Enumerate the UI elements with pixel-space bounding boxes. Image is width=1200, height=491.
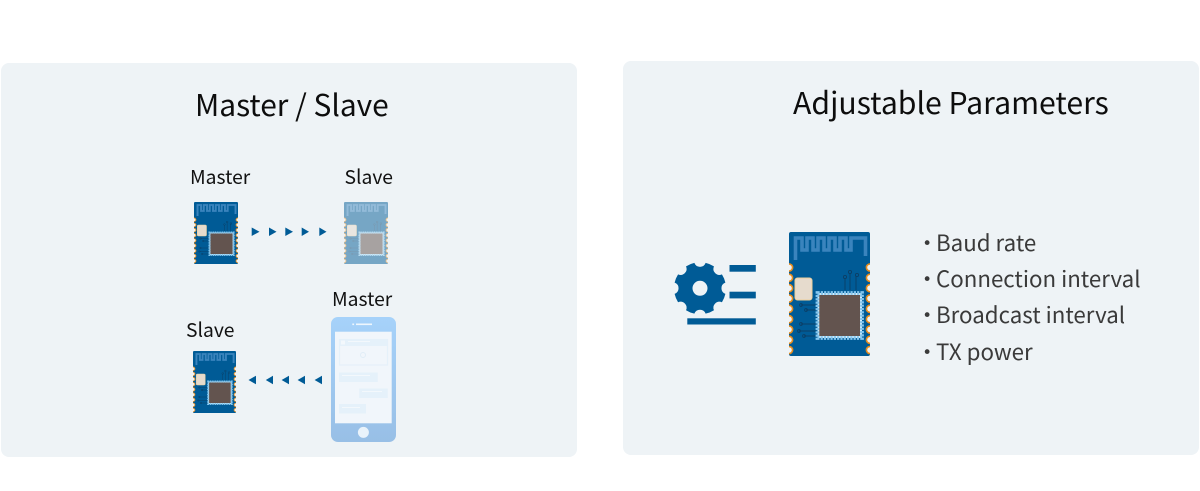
list: parameters: ·: [916, 298, 938, 330]
arrows: phone to slave: [248, 376, 322, 384]
label: Slave bottom: Slave: [186, 315, 234, 343]
list: parameters: Broadcast interval: [936, 298, 1125, 330]
heading: Master / Slave: Master / Slave: [195, 81, 389, 125]
list: parameters: ·: [916, 226, 938, 258]
label: Slave top: Slave: [344, 162, 393, 190]
list: parameters: Baud rate: [936, 226, 1036, 258]
icon: settings gear with bars: [675, 263, 756, 324]
list: parameters: [916, 226, 1141, 367]
panel: adjustable parameters: [623, 61, 1199, 455]
label: Master top: Master: [190, 162, 251, 190]
icon: slave module faded: [342, 202, 390, 264]
heading: Adjustable Parameters: Adjustable Parameters: [793, 79, 1109, 123]
label: Master phone: Master: [332, 284, 393, 312]
arrows: master to slave: [252, 228, 326, 236]
list: parameters: ·: [916, 262, 938, 294]
list: parameters: Connection interval: [936, 262, 1141, 294]
icon: smartphone: [331, 317, 396, 442]
icon: master module: [192, 202, 240, 264]
icon: bluetooth module large: [785, 232, 874, 356]
icon: slave module: [191, 351, 238, 413]
list: parameters: TX power: [936, 335, 1033, 367]
panel: master / slave: [1, 63, 577, 457]
list: parameters: ·: [916, 335, 938, 367]
